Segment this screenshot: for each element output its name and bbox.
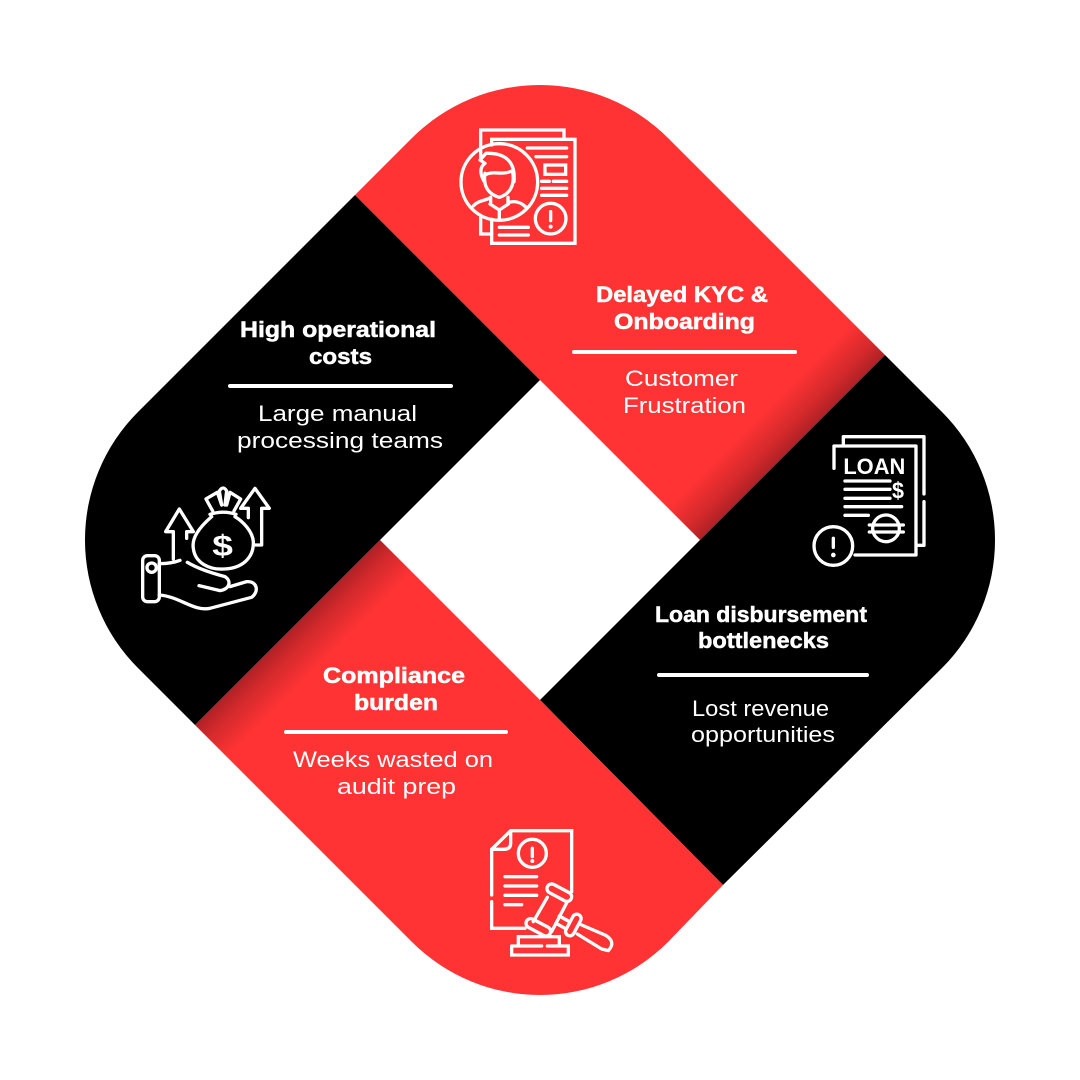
panel: delayed KYC and onboarding [355,85,885,540]
description [293,747,493,799]
description: processing teams [237,428,443,453]
heading: Compliance [323,663,465,688]
black segment left [85,195,540,725]
description: Lost revenue [692,696,829,721]
heading: Delayed KYC & [596,282,768,307]
heading: costs [309,344,372,369]
icon: customer profile document [461,130,575,243]
description: Weeks wasted on [293,747,493,772]
icon: loan document: $ [892,478,904,504]
icon: hand holding money bag [143,488,269,609]
description: audit prep [337,774,456,799]
description: Customer [625,366,739,391]
red segment bottom [195,540,723,995]
description [623,366,746,418]
description: Frustration [623,393,746,418]
panel: high operational costs [85,195,540,725]
description: Large manual [258,401,417,426]
description: opportunities [691,722,835,747]
panel: compliance burden [195,540,723,995]
panel: loan disbursement bottlenecks [540,355,995,885]
heading: Loan disbursement [655,602,868,627]
icon: loan document [814,437,924,565]
red segment top [355,85,885,540]
heading [596,282,768,334]
heading: burden [354,690,438,715]
heading: Onboarding [614,309,755,334]
icon: hand holding money bag: $ [212,530,233,563]
heading: High operational [240,317,436,342]
heading [655,602,868,653]
icon: loan document: LOAN [843,454,905,479]
heading: bottlenecks [698,628,829,653]
description [237,401,443,453]
icon: document and gavel [492,831,612,955]
heading [323,663,465,715]
heading [240,317,436,369]
black segment right [540,355,995,885]
description [691,696,835,747]
